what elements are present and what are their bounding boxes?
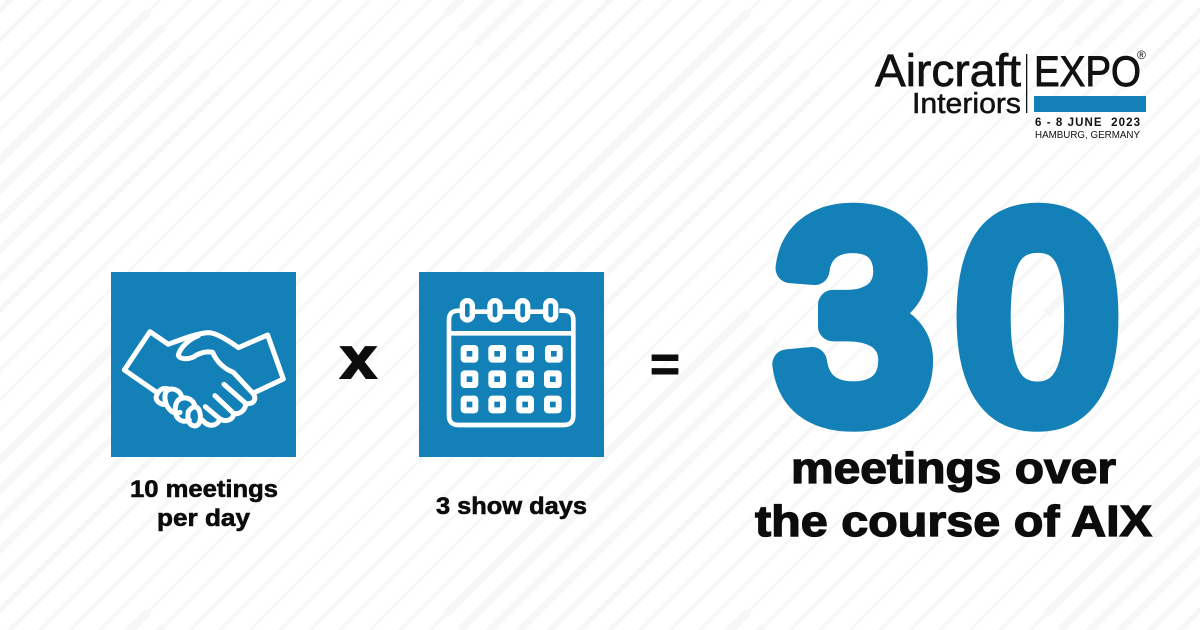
label: 10 meetings per day: per day xyxy=(157,505,251,532)
logo: Aircraft Interiors Expo xyxy=(875,45,1146,141)
logo wordmark: Aircraft: Aircraft xyxy=(875,45,1022,96)
label: 10 meetings per day: 10 meetings xyxy=(130,476,278,503)
headline: meetings over the course of AIX xyxy=(755,444,1152,546)
big number: 30: 0 xyxy=(961,161,1114,474)
logo date: 6 - 8 JUNE 2023 xyxy=(1035,117,1140,129)
headline: meetings over the course of AIX: the course of AIX xyxy=(755,497,1152,546)
operator: multiply: x xyxy=(340,326,377,391)
icon: calendar xyxy=(449,301,573,425)
logo wordmark: EXPO: EXPO xyxy=(1034,48,1141,96)
big number: 30: 3 xyxy=(777,161,930,474)
headline: meetings over the course of AIX: meetings over xyxy=(791,444,1116,493)
logo blue bar xyxy=(1034,96,1146,112)
label: 10 meetings per day xyxy=(130,476,278,532)
big number: 30 xyxy=(777,161,1114,474)
label: 3 show days: 3 show days xyxy=(436,493,587,520)
logo divider xyxy=(1026,54,1027,113)
logo wordmark: Interiors: Interiors xyxy=(912,88,1021,120)
logo location: HAMBURG, GERMANY xyxy=(1035,129,1140,141)
operator: equals: = xyxy=(650,336,680,392)
panel: calendar icon tile xyxy=(419,272,604,457)
logo registered mark: ® xyxy=(1137,48,1146,62)
panel: handshake icon tile xyxy=(111,272,296,457)
icon: handshake xyxy=(124,332,283,426)
